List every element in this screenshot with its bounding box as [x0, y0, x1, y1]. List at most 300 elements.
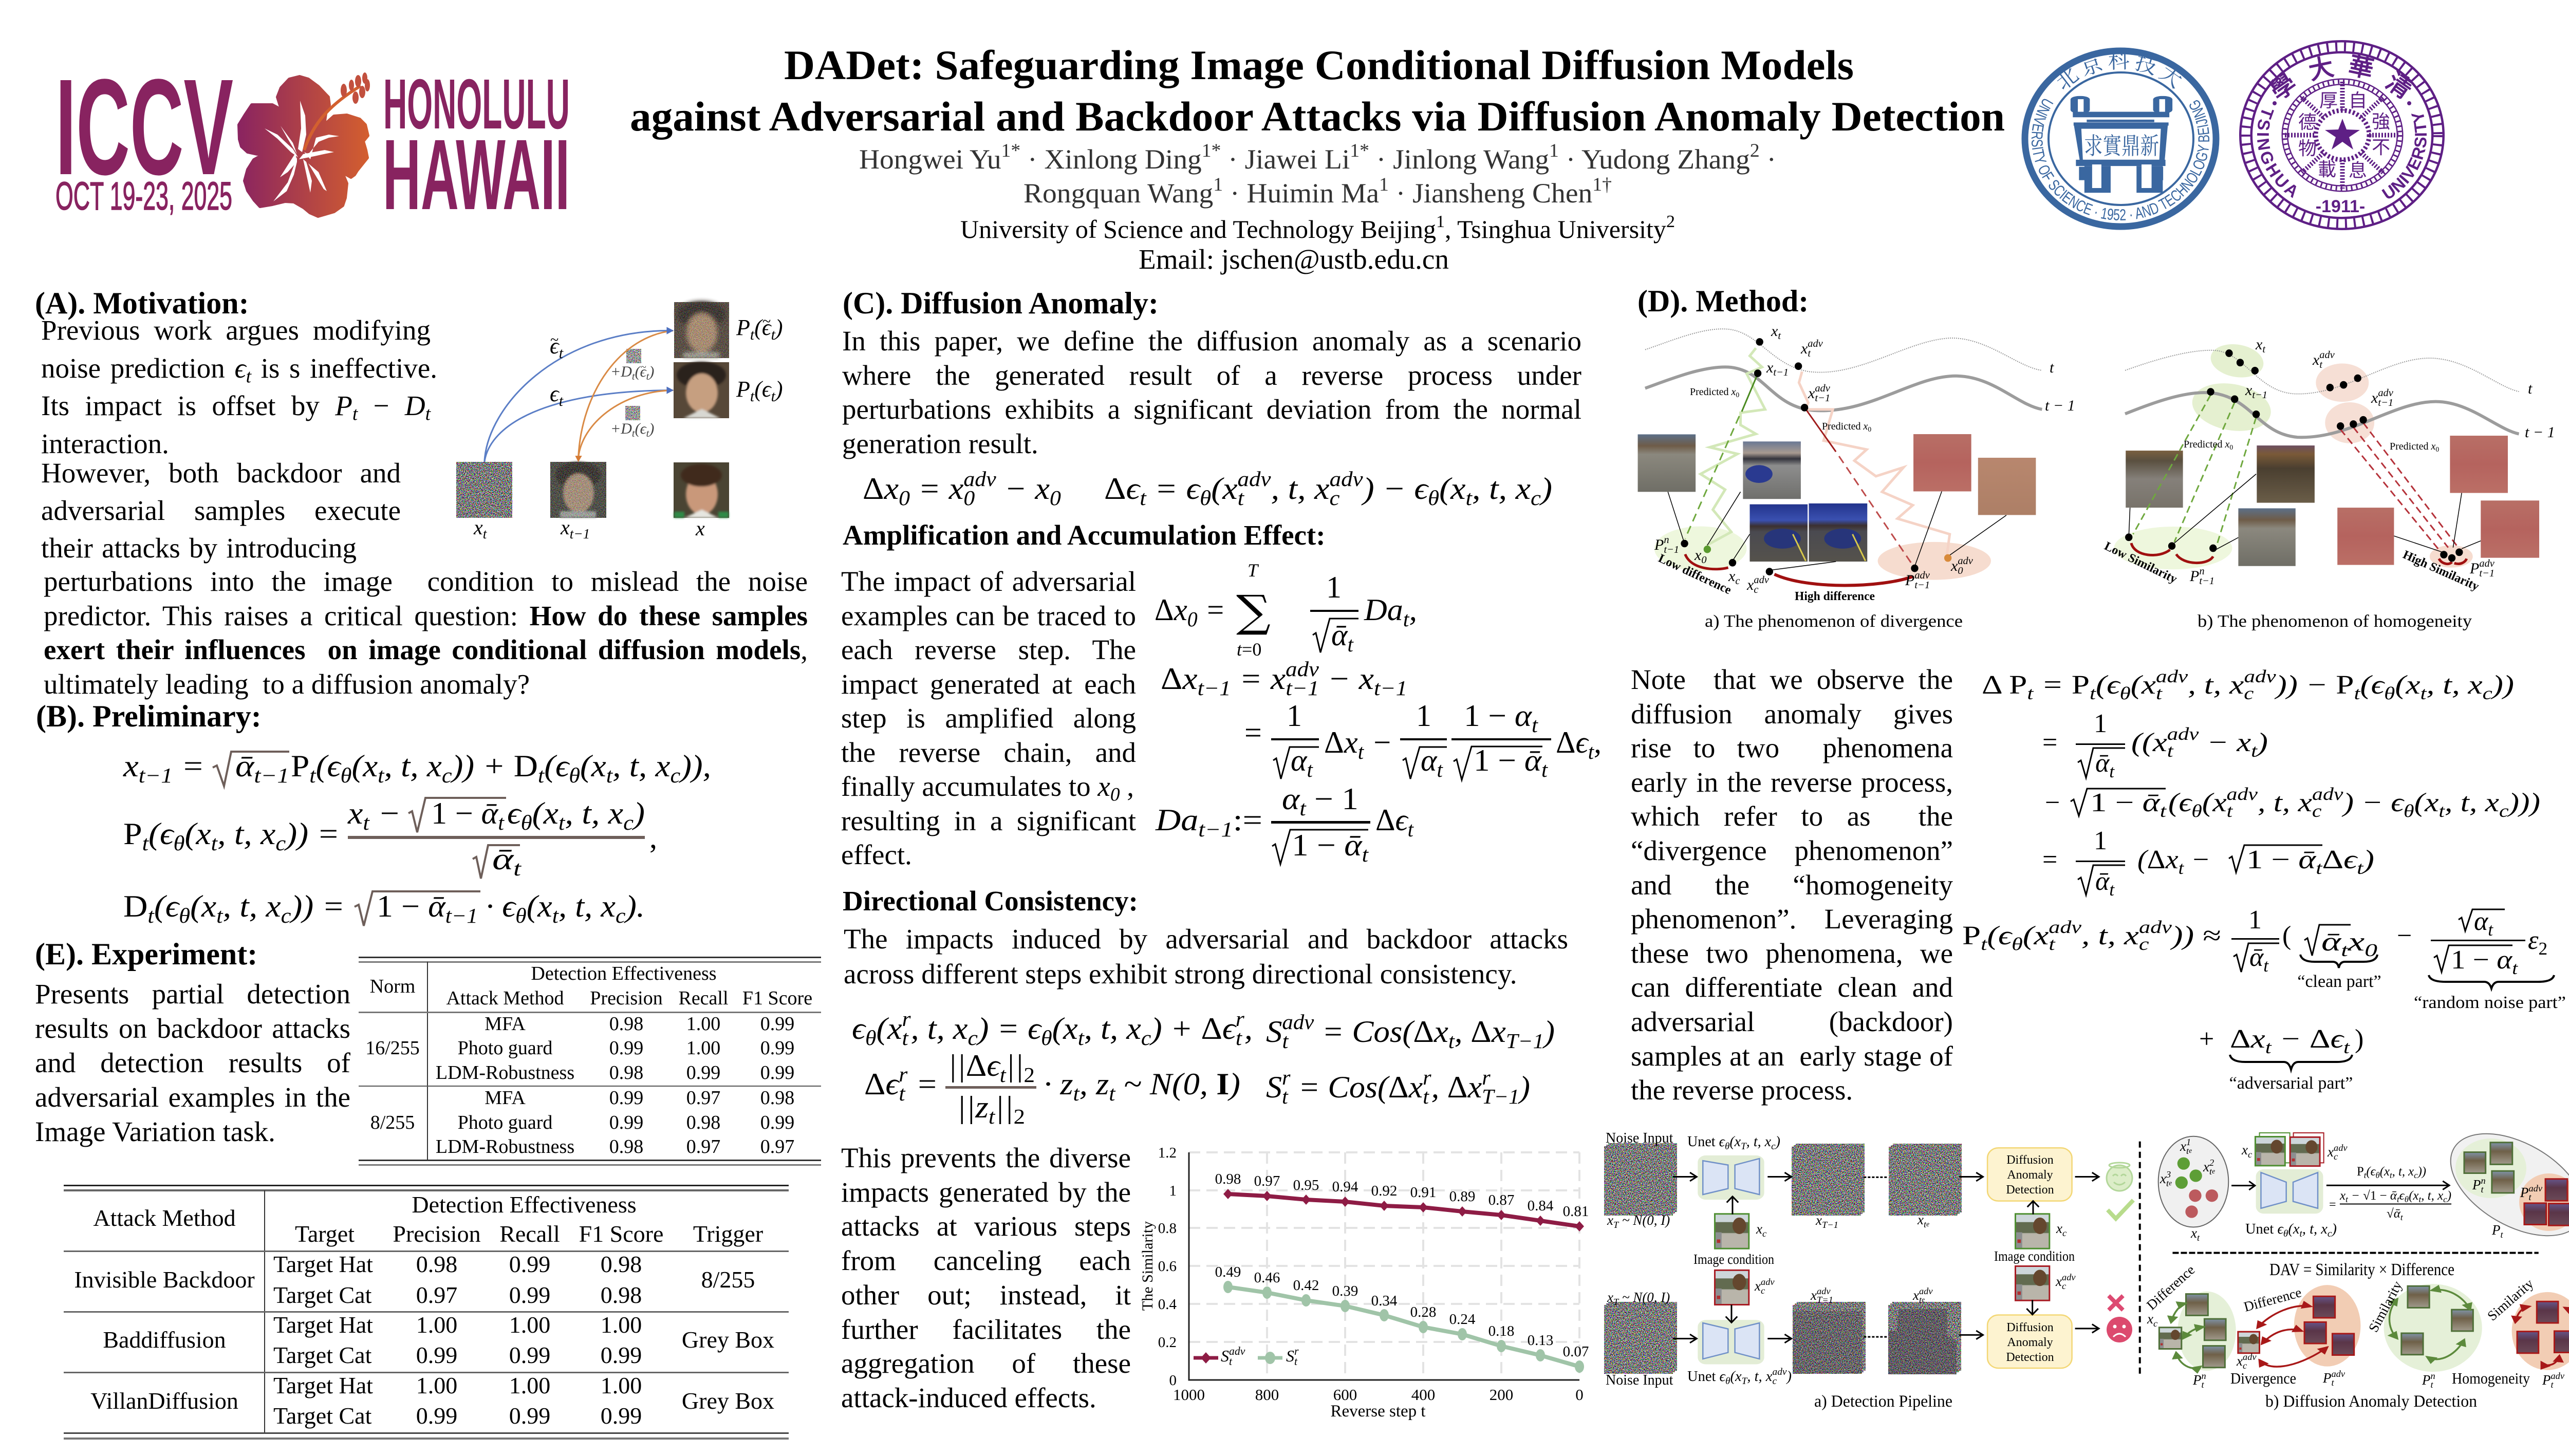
x axis title: Reverse step t [1330, 1402, 1426, 1421]
labels: divergence: x0adv [1950, 555, 1974, 576]
text: motivation opening [41, 314, 437, 459]
pipeline labels [1606, 1130, 2076, 1388]
equation: sum over steps: ∑ [1236, 586, 1271, 637]
equation: sum over steps [1155, 560, 1417, 660]
series: S adv [1215, 1171, 1589, 1231]
text: motivation question: perturbations into the image condition to mislead the noise [44, 566, 808, 597]
thumbnails and lower panels [2159, 1143, 2569, 1372]
table: adversarial detection effectiveness: 1.00 [686, 1013, 720, 1035]
math labels: Pt(ϵt) [736, 377, 783, 405]
table: adversarial detection effectiveness: 0.98 [609, 1013, 643, 1035]
logo: Tsinghua emblem: 德 [2298, 112, 2317, 133]
labels: anomaly detection: x2te [2203, 1158, 2215, 1177]
equation: expansion line three: 1 − ᾱ tΔϵt) [2246, 845, 2374, 878]
heading: method: (D). Method: [1637, 284, 1809, 318]
labels: anomaly detection: Similarity [2366, 1278, 2405, 1335]
text: motivation opening: Its impact is offset by Pt − Dt [41, 390, 431, 425]
table: backdoor detection effectiveness: Target Hat [273, 1251, 373, 1277]
labels: homogeneity: Pnt−1 [2189, 566, 2214, 587]
equation: reverse step: Pt(ϵθ(xt, t, xc)) + Dt(ϵθ(xt, t, xc)), [291, 749, 711, 787]
text: method note: adversarial (backdoor) [1631, 1006, 1953, 1037]
text: motivation question [44, 565, 808, 702]
table: backdoor detection effectiveness: Detection Effectiveness [412, 1191, 637, 1218]
table: backdoor detection effectiveness: Invisible Backdoor [74, 1266, 255, 1293]
equations: directional consistency: Str = Cos(Δxtr, ΔxrT−1) [1266, 1066, 1530, 1108]
equation: decomposition with clean, noise and adversarial parts: 1 [2248, 905, 2262, 935]
equation: Da definition: αt − 1 [1282, 782, 1358, 820]
pipeline labels: xT ~ N(0, I) [1607, 1212, 1670, 1230]
equation: sum over steps: t=0 [1237, 639, 1261, 660]
table: adversarial detection effectiveness: LDM-Robustness [436, 1136, 574, 1158]
labels: homogeneity: Low Similarity [2102, 539, 2179, 586]
labels: anomaly detection [2144, 1137, 2565, 1389]
image: noisy x_t [456, 462, 512, 518]
logo: Tsinghua emblem [2239, 40, 2445, 230]
x axis labels: 600 [1333, 1386, 1357, 1404]
text: experiment summary: adversarial examples in the [35, 1081, 350, 1113]
table: backdoor detection effectiveness: 1.00 [416, 1312, 457, 1338]
math labels: ~ [762, 313, 771, 330]
text: experiment summary: results on backdoor attacks [35, 1013, 350, 1044]
text: anomaly definition: generation result. [842, 427, 1038, 459]
image: predicted face clean [674, 362, 729, 418]
labels: anomaly detection: Pt [2491, 1222, 2503, 1239]
table: adversarial detection effectiveness: LDM-Robustness [436, 1062, 574, 1084]
equation: decomposition with clean, noise and adversarial parts: Δxt − Δϵt [2230, 1024, 2350, 1057]
labels: anomaly detection: xcadv [2236, 1352, 2257, 1371]
pipeline labels: Image condition [1994, 1248, 2075, 1264]
labels: homogeneity: xadvt−1 [2371, 387, 2394, 408]
equation: decomposition with clean, noise and adversarial parts: + [2199, 1024, 2214, 1054]
table: backdoor detection effectiveness: 1.00 [416, 1372, 457, 1398]
pipeline labels: Anomaly [2007, 1168, 2053, 1182]
labels: divergence: Predicted x0 [1690, 386, 1739, 399]
labels: homogeneity: xtadv [2312, 349, 2335, 370]
noise stacks, bottom row [1604, 1302, 1961, 1374]
authors: Rongquan Wang 1 · Huimin Ma1 · Jiansheng Chen 1† [1023, 174, 1612, 209]
text: method note: samples at an early stage of [1631, 1040, 1953, 1072]
logo: ICCV Honolulu Hawaii [55, 51, 570, 231]
y axis labels: 0.2 [1158, 1334, 1177, 1351]
logo: Tsinghua emblem: -1911- [2316, 197, 2365, 216]
equation: Da definition: Δϵt [1375, 803, 1414, 841]
labels: homogeneity: Predicted x0 [2184, 439, 2233, 451]
heading: diffusion anomaly: (C). Diffusion Anomaly: [843, 286, 1159, 320]
series: S r: 0.39 [1332, 1283, 1358, 1299]
labels: divergence: x0 [1694, 547, 1707, 566]
equations: directional consistency: · zt, zt ~ N(0, I) [1044, 1067, 1240, 1105]
table: backdoor detection effectiveness: Target Cat [273, 1282, 372, 1308]
y axis labels: 1 [1169, 1183, 1177, 1199]
x axis labels: 0 [1575, 1386, 1584, 1404]
equation: expansion line two: (ϵθ(xtadv, t, x cadv) − ϵ θ(xt, t, x c))) [2168, 783, 2540, 821]
logo: Tsinghua emblem: TSINGHUA [2257, 110, 2297, 198]
pipeline labels: Detection [2006, 1351, 2054, 1364]
labels: anomaly detection: x3te [2160, 1169, 2172, 1188]
text: aggregation explanation: other out; instead, it [841, 1279, 1131, 1311]
text: experiment summary: and detection results of [35, 1047, 350, 1078]
equations: method derivation [1962, 666, 2566, 1093]
equation: step difference: Δxt−1 = xadvt−1 − xt−1 [1161, 658, 1407, 700]
logo: Tsinghua emblem: 物 [2298, 138, 2317, 159]
subheading: directional consistency: Directional Consistency: [843, 885, 1138, 917]
equation: decomposition with clean, noise and adversarial parts: Pt(ϵ θ(x tadv, t, x cadv)) ≈ [1962, 917, 2221, 954]
labels: divergence: xadvt−1 [1808, 383, 1831, 404]
caption: homogeneity: b) The phenomenon of homogeneity [2198, 612, 2472, 631]
equations: amplification and accumulation [1155, 560, 1602, 866]
equation: reverse step: xt−1 = [123, 749, 204, 787]
series: S r: 0.42 [1293, 1277, 1319, 1294]
text: amplification explanation: examples can be traced to [841, 600, 1136, 631]
equations: preliminary [123, 749, 711, 927]
x axis labels: 1000 [1173, 1386, 1205, 1404]
table: backdoor detection effectiveness: Baddiffusion [103, 1327, 226, 1353]
equations: directional consistency: ϵθ(xtr, t, xc) = ϵθ(xt, t, xc) + Δϵtr, [852, 1007, 1253, 1050]
equation: decomposition with clean, noise and adversarial parts: ( [2282, 921, 2291, 950]
table: backdoor detection effectiveness: Target Cat [273, 1342, 372, 1368]
equation: direction term: · ϵθ(xt, t, xc). [486, 889, 645, 927]
table: adversarial detection effectiveness: Norm [370, 976, 415, 997]
text: method note: Note that we observe the [1631, 664, 1953, 695]
labels: divergence: t [2050, 359, 2054, 376]
equation: expansion line two: − [2045, 788, 2060, 817]
table: backdoor detection effectiveness: VillanDiffusion [90, 1388, 238, 1414]
math labels: +Dt(ϵt) [610, 363, 654, 382]
heading: motivation: (A). Motivation: [35, 286, 249, 320]
table: adversarial detection effectiveness: 0.99 [760, 1062, 794, 1084]
table: backdoor detection effectiveness: Target Cat [273, 1403, 372, 1429]
table: backdoor detection effectiveness: 0.99 [509, 1282, 550, 1308]
text: aggregation explanation: further facilitates the [841, 1314, 1131, 1345]
table: adversarial detection effectiveness: Detection Effectiveness [531, 963, 717, 984]
labels: divergence: xc [1728, 568, 1740, 587]
table: backdoor detection effectiveness: Target [295, 1221, 355, 1247]
equation: predicted difference: Δ P t = Pt(ϵθ(xtadv, t, x cadv)) − Pt(ϵθ(xt, t, x c)) [1982, 666, 2514, 703]
equation: decomposition with clean, noise and adversarial parts: ᾱ tx 0 [2321, 927, 2377, 960]
labels: divergence: Padvt−1 [1905, 570, 1930, 591]
x axis labels: 800 [1255, 1386, 1279, 1404]
equation: direction term: Dt(ϵθ(xt, t, xc)) = [123, 889, 345, 927]
table: adversarial detection effectiveness: 0.98 [760, 1087, 794, 1109]
table: adversarial detection effectiveness: 0.97 [686, 1136, 720, 1158]
series: S adv: 0.87 [1488, 1192, 1514, 1208]
equation: predicted term [123, 796, 657, 880]
text: method note: the reverse process. [1631, 1074, 1853, 1106]
text: amplification explanation: effect. [841, 839, 912, 870]
table: adversarial detection effectiveness: 0.99 [609, 1112, 643, 1133]
series: S adv: 0.92 [1371, 1183, 1397, 1199]
table: backdoor detection effectiveness: 0.98 [601, 1282, 642, 1308]
logo: Tsinghua emblem: 載 [2318, 159, 2336, 180]
labels: anomaly detection: Unet ϵθ(xt, t, xc) [2245, 1221, 2337, 1239]
equation: expansion [1244, 699, 1602, 781]
title [630, 42, 2005, 140]
text: method note: and the “homogeneity [1631, 869, 1953, 901]
table: adversarial detection effectiveness: 0.99 [609, 1037, 643, 1059]
equation: expansion line three: (Δxt − [2137, 845, 2210, 878]
x axis labels: 400 [1411, 1386, 1435, 1404]
logo: Tsinghua emblem: 大 [2306, 53, 2336, 85]
text: aggregation explanation: from canceling each [841, 1245, 1131, 1276]
logo: Tsinghua emblem: 華 [2346, 52, 2376, 84]
table: backdoor detection effectiveness: 0.99 [416, 1342, 457, 1368]
equation: decomposition with clean, noise and adversarial parts: “clean part” [2297, 972, 2381, 991]
labels: anomaly detection: Ptn [2472, 1175, 2486, 1194]
big ellipse with groups [2433, 1113, 2569, 1257]
series: S r: 0.46 [1254, 1270, 1280, 1286]
text: anomaly definition: perturbations exhibits a significant deviation from the normal [842, 394, 1581, 425]
caption: anomaly detection: b) Diffusion Anomaly Detection [2265, 1392, 2477, 1411]
figure: detection pipeline [1604, 1130, 2133, 1411]
figure: diffusion anomaly detection [2140, 1113, 2569, 1411]
pipeline labels: xcadv [2055, 1272, 2076, 1291]
table: backdoor detection effectiveness: 1.00 [509, 1372, 550, 1398]
table: adversarial detection effectiveness: 16/255 [365, 1037, 420, 1059]
text: directional consistency: across different steps exhibit strong directional consistency. [844, 958, 1517, 990]
series: S adv: 0.97 [1254, 1173, 1280, 1189]
series: S adv: 0.98 [1215, 1171, 1241, 1187]
logo: Tsinghua emblem: 學 [2265, 69, 2301, 106]
table: backdoor detection effectiveness: Grey Box [682, 1327, 774, 1353]
table: adversarial detection effectiveness: Attack Method [446, 987, 564, 1009]
labels: anomaly detection: Difference [2144, 1262, 2198, 1313]
math labels: xt−1 [560, 516, 590, 542]
heading: experiment: (E). Experiment: [35, 937, 257, 971]
labels: divergence: t − 1 [2045, 397, 2075, 414]
equation: predicted term: ϵθ(xt, t, x c) [507, 796, 645, 834]
text: anomaly definition: where the generated result of a reverse process under [842, 360, 1581, 390]
series: S r: 0.13 [1528, 1332, 1553, 1349]
labels: homogeneity: t − 1 [2525, 424, 2555, 441]
table: adversarial detection effectiveness: Recall [678, 987, 729, 1009]
table: adversarial detection effectiveness: Photo guard [458, 1112, 552, 1133]
series: S r [1215, 1264, 1589, 1373]
labels: anomaly detection: = [2329, 1198, 2336, 1211]
equation: expansion line one: = [2042, 728, 2057, 757]
equations: directional consistency [852, 1007, 1555, 1128]
text: motivation opening: Previous work argues modifying [41, 314, 431, 346]
labels: anomaly detection: Ptadv [2322, 1369, 2345, 1387]
equation: decomposition with clean, noise and adversarial parts: “random noise part” [2414, 993, 2566, 1012]
math labels: x [695, 517, 705, 540]
affiliations and email: University of Science and Technology Beijing1, Tsinghua University2 [960, 212, 1675, 244]
math labels: +Dt(ϵt) [610, 420, 654, 439]
text: directional consistency [844, 922, 1568, 992]
labels: homogeneity: High Similarity [2401, 548, 2481, 593]
text: method note: “divergence phenomenon” [1631, 835, 1953, 866]
labels: divergence: Low difference [1656, 552, 1734, 597]
icon: sad face [2107, 1317, 2132, 1342]
equation: expansion: Δϵt, [1556, 725, 1602, 763]
table: adversarial detection effectiveness: MFA [485, 1087, 526, 1109]
series: S adv: 0.91 [1410, 1184, 1436, 1201]
table: backdoor detection effectiveness [64, 1185, 789, 1440]
text: motivation opening: noise prediction ϵt is s ineffective. [41, 352, 437, 387]
text: method note: phenomenon”. Leveraging [1631, 903, 1953, 935]
labels: homogeneity: Predicted x0 [2390, 441, 2439, 453]
authors [859, 140, 1776, 209]
table: backdoor detection effectiveness: 1.00 [601, 1312, 642, 1338]
table: adversarial detection effectiveness: MFA [485, 1013, 526, 1035]
title: DADet: Safeguarding Image Conditional Diffusion Models [784, 42, 1854, 88]
affiliations and email: Email: jschen@ustb.edu.cn [1139, 244, 1449, 275]
heading: preliminary: (B). Preliminary: [36, 699, 262, 733]
labels: anomaly detection: xcadv [2327, 1143, 2348, 1161]
pipeline labels: xte [1917, 1212, 1929, 1229]
labels: anomaly detection: Similarity [2484, 1276, 2537, 1324]
logo: Tsinghua emblem: 自 [2349, 90, 2367, 111]
panel: homogeneity diagram [2102, 336, 2555, 631]
equations: directional consistency: Δϵtr = [864, 1063, 938, 1105]
equation: expansion line one: ((x tadv − x t) [2131, 723, 2268, 761]
labels: homogeneity: xt−1 [2245, 382, 2267, 401]
y axis labels: 1.2 [1158, 1145, 1177, 1161]
y axis labels: 0.6 [1158, 1258, 1177, 1275]
equation: expansion: αt [1291, 743, 1313, 781]
table: backdoor detection effectiveness: 0.98 [601, 1251, 642, 1277]
labels: anomaly detection: Ptn [2192, 1371, 2206, 1389]
table: backdoor detection effectiveness: 1.00 [601, 1372, 642, 1398]
equations: anomaly definition [863, 468, 1552, 510]
pipeline labels: xT ~ N(0, I) [1607, 1290, 1670, 1307]
panel: divergence diagram [1638, 323, 2075, 631]
table: adversarial detection effectiveness: 0.99 [760, 1037, 794, 1059]
y axis title: The Similarity [1139, 1221, 1156, 1311]
math labels: ~ [641, 362, 646, 373]
math labels: xt [473, 516, 488, 542]
equation: decomposition with clean, noise and adversarial parts: ᾱt [2249, 943, 2269, 976]
x axis labels [1173, 1386, 1584, 1404]
text: amplification explanation: each reverse step. The [841, 634, 1136, 665]
text: method note: rise to two phenomena [1631, 732, 1953, 763]
text: experiment summary: Image Variation task. [35, 1116, 275, 1147]
table: backdoor detection effectiveness: Target Hat [273, 1372, 373, 1398]
chart: similarity versus reverse step [1139, 1145, 1589, 1421]
text: experiment summary: Presents partial detection [35, 978, 350, 1010]
table: backdoor detection effectiveness: Target Hat [273, 1312, 373, 1338]
text: method note: early in the reverse process, [1631, 767, 1953, 798]
text: aggregation explanation: attack-induced effects. [841, 1382, 1096, 1413]
equations: directional consistency: ||zt||2 [957, 1090, 1025, 1128]
table: backdoor detection effectiveness: 0.97 [416, 1282, 457, 1308]
text: motivation attacks: their attacks by introducing [41, 532, 357, 564]
text: amplification explanation: finally accumulates to x0 , [841, 771, 1134, 805]
labels: divergence: xtadv [1800, 338, 1823, 359]
series: S adv: 0.94 [1332, 1179, 1358, 1195]
pipeline labels: xT−1 [1815, 1212, 1838, 1230]
figure: denoising prediction faces [456, 301, 783, 542]
equation: Da definition: 1 − ᾱt [1292, 828, 1369, 866]
table: adversarial detection effectiveness: 0.99 [609, 1087, 643, 1109]
equation: predicted term: Pt(ϵθ(xt, t, xc)) = [123, 817, 340, 855]
table: backdoor detection effectiveness: Trigger [693, 1221, 763, 1247]
equation: expansion line one: ᾱt [2095, 749, 2115, 781]
text: HONOLULU [383, 65, 570, 144]
labels: homogeneity: Padvt−1 [2469, 558, 2495, 579]
icon: cross mark [2109, 1296, 2123, 1310]
text: amplification explanation: impact generated at each [841, 668, 1136, 700]
table: adversarial detection effectiveness: 8/255 [370, 1112, 415, 1133]
table: backdoor detection effectiveness: 0.99 [601, 1403, 642, 1429]
labels: divergence: xt [1771, 323, 1781, 342]
text: anomaly definition [842, 324, 1581, 461]
equation: expansion line three: 1 [2094, 826, 2107, 855]
logo: Tsinghua emblem: 息 [2349, 160, 2367, 181]
equation: expansion: αt [1421, 743, 1444, 781]
labels: anomaly detection: Ptadv [2542, 1371, 2565, 1389]
table: adversarial detection effectiveness: 0.99 [686, 1062, 720, 1084]
caption: divergence: a) The phenomenon of divergence [1705, 612, 1963, 631]
icon: check mark [2108, 1200, 2133, 1219]
y axis labels: 0.8 [1158, 1220, 1177, 1237]
labels: homogeneity: t [2528, 380, 2533, 397]
series: S adv: 0.81 [1563, 1203, 1589, 1220]
logo: Tsinghua emblem: UNIVERSITY [2381, 114, 2427, 198]
affiliations and email [960, 212, 1675, 275]
logo: Tsinghua emblem: 厚 [2319, 90, 2338, 111]
table: backdoor detection effectiveness: 1.00 [509, 1312, 550, 1338]
labels: divergence [1654, 323, 2075, 603]
caption: detection pipeline: a) Detection Pipeline [1814, 1392, 1952, 1411]
table: backdoor detection effectiveness: Precision [393, 1221, 481, 1247]
pipeline labels: Noise Input [1606, 1130, 1673, 1146]
labels: anomaly detection: √ᾱt [2387, 1207, 2404, 1222]
pipeline labels: xc [1756, 1221, 1766, 1238]
text: motivation attacks [41, 454, 401, 567]
table: backdoor detection effectiveness: 0.98 [416, 1251, 457, 1277]
labels: divergence: Predicted x0 [1822, 421, 1871, 433]
equation: expansion: = [1244, 716, 1262, 750]
equation: expansion line three: ᾱt [2095, 867, 2115, 900]
labels: anomaly detection: x1te [2180, 1137, 2192, 1156]
labels: divergence: xt−1 [1766, 359, 1789, 378]
equations: directional consistency: Stadv = Cos(Δxt, ΔxT−1) [1266, 1011, 1555, 1053]
text: aggregation explanation: aggregation of these [841, 1348, 1131, 1379]
logo: hibiscus flower [239, 72, 370, 216]
logo date: OCT 19-23, 2025 [55, 174, 232, 218]
logo: Tsinghua emblem: 強 [2372, 111, 2390, 132]
table: adversarial detection effectiveness: F1 Score [742, 987, 812, 1009]
equations: anomaly definition: Δx0 = x0adv − x0 [863, 468, 1061, 510]
series: S r: 0.28 [1410, 1304, 1436, 1320]
labels: anomaly detection: Ptadv [2520, 1183, 2543, 1202]
math labels: Pt(ϵt) [736, 315, 783, 343]
legend [1194, 1345, 1299, 1368]
text: amplification explanation: step is amplified along [841, 702, 1136, 734]
equation: expansion line one: 1 [2094, 709, 2107, 738]
series: S adv: 0.84 [1528, 1198, 1554, 1214]
pipeline labels: Unet ϵθ(xT, t, xcadv) [1687, 1367, 1792, 1387]
equation: sum over steps: Dat, [1364, 593, 1417, 631]
equation: decomposition with clean, noise and adversarial parts: “adversarial part” [2229, 1074, 2353, 1093]
equation: decomposition with clean, noise and adversarial parts [1962, 905, 2566, 1093]
labels: homogeneity [2102, 336, 2555, 593]
logo: Tsinghua emblem: 清 [2381, 68, 2417, 104]
text: motivation question: predictor. This raises a critical question: How do these samples [44, 600, 808, 631]
logo wordmark ICCV: ICCV [55, 51, 234, 203]
equation: expansion: Δxt − [1324, 725, 1392, 763]
text: motivation opening: interaction. [41, 428, 169, 459]
labels: anomaly detection: Ptn [2422, 1371, 2435, 1389]
pipeline labels: Diffusion [2006, 1321, 2054, 1334]
series: S r: 0.24 [1449, 1311, 1476, 1328]
labels: homogeneity: xt [2255, 336, 2266, 355]
equation: sum over steps: 1 [1326, 570, 1342, 604]
table: adversarial detection effectiveness: 0.97 [760, 1136, 794, 1158]
text: method note: which refer to as the [1631, 800, 1953, 832]
equations: anomaly definition: Δϵt = ϵθ(xtadv, t, x cadv) − ϵ θ(xt, t, x c) [1104, 468, 1552, 510]
pipeline labels: Unet ϵθ(xT, t, xc) [1687, 1134, 1780, 1152]
